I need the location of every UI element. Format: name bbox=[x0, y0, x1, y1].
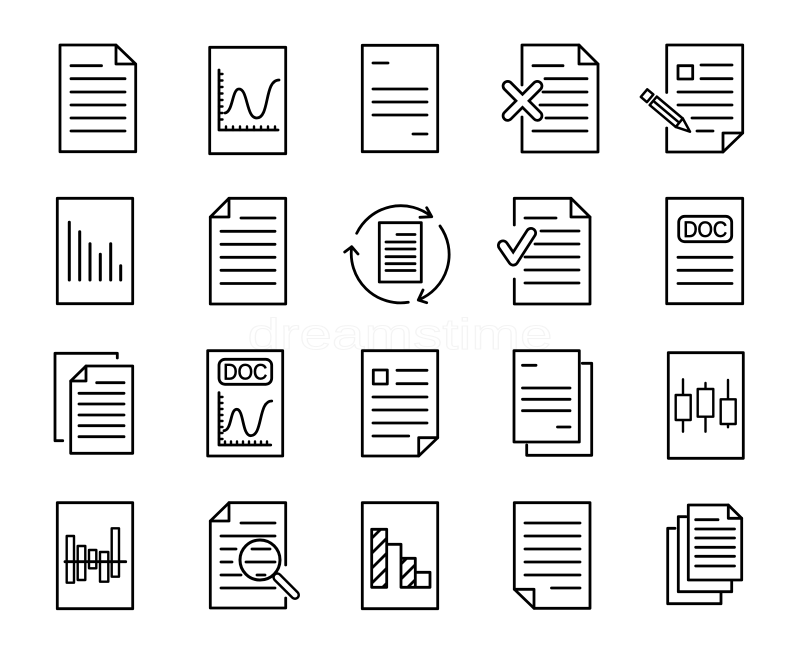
icon: document with magnifying glass bbox=[210, 503, 295, 608]
icon: document with folded top-left corner bbox=[210, 198, 286, 304]
icon: DOC document with graph bbox=[208, 351, 283, 456]
icon: DOC document with lines bbox=[667, 198, 743, 304]
watermark: dreamstime bbox=[248, 310, 552, 359]
DOC label: DOC bbox=[683, 217, 727, 242]
icon: document with candlestick chart bbox=[668, 353, 743, 458]
icon: plain letter document bbox=[362, 45, 438, 152]
DOC label: DOC bbox=[223, 360, 267, 385]
icon: document with folded top-right corner bbox=[60, 45, 136, 152]
icon: document with thin bars bbox=[57, 198, 133, 304]
icon: document with cross mark bbox=[508, 45, 598, 152]
icon: two stacked letter documents bbox=[514, 351, 592, 455]
icon: document with image and folded bottom-right corner bbox=[362, 351, 438, 456]
arrow: right bbox=[418, 226, 449, 303]
icon: stack of documents bbox=[668, 505, 742, 604]
icon: document inside circular arrows bbox=[345, 206, 449, 303]
arrow: left bbox=[345, 247, 408, 303]
icon: document with check mark bbox=[503, 198, 590, 304]
icon: document with folded bottom-left corner bbox=[514, 503, 590, 608]
candle 1 bbox=[676, 379, 691, 432]
candle 3 bbox=[721, 380, 736, 427]
icon: copy of documents bbox=[55, 353, 133, 453]
pencil bbox=[641, 89, 694, 136]
icon: document with hatched bar chart bbox=[362, 503, 438, 609]
icon: document with pencil bbox=[641, 45, 743, 152]
arrow: top bbox=[357, 206, 432, 233]
candle 2 bbox=[698, 383, 713, 432]
icon: document with mirrored bar chart bbox=[57, 503, 133, 609]
icon: document with line graph bbox=[210, 47, 286, 154]
